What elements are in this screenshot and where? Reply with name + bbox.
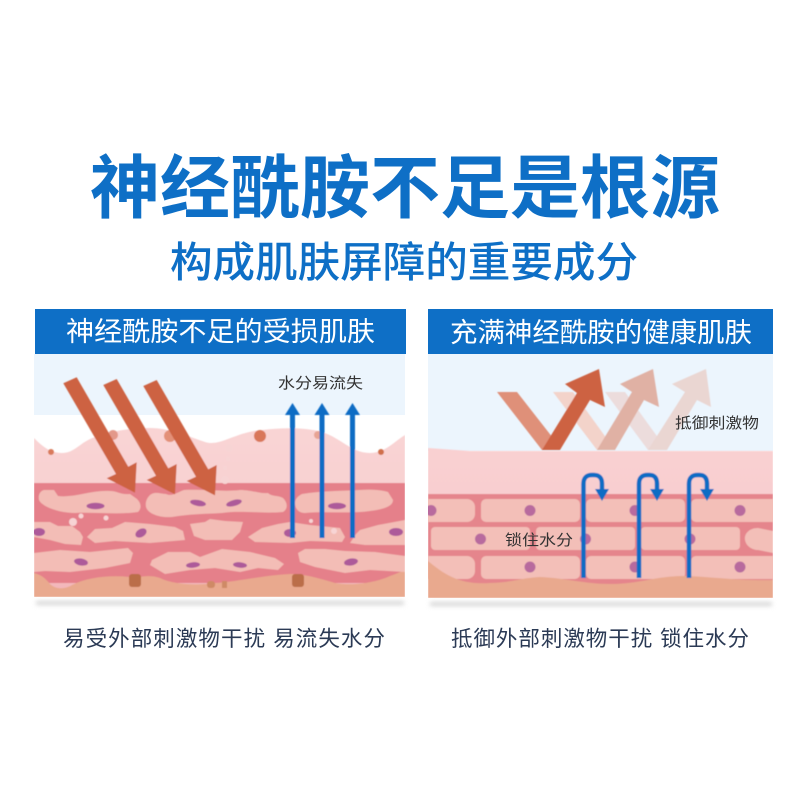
label: lock water: 锁住水分 xyxy=(505,532,573,549)
panel: damaged skin xyxy=(33,309,406,651)
subtitle: 构成肌肤屏障的重要成分 xyxy=(170,239,638,286)
cell nuclei xyxy=(426,505,746,572)
title: 神经酰胺不足是根源 xyxy=(90,150,720,227)
caption: 抵御外部刺激物干扰 锁住水分 xyxy=(451,627,749,651)
panel shadow xyxy=(430,602,772,606)
cell nuclei xyxy=(33,498,403,568)
skin cells xyxy=(410,499,786,579)
header text: 充满神经酰胺的健康肌肤 xyxy=(450,318,752,348)
icon: three orange arrows pointing down into skin xyxy=(63,377,217,495)
skin layers xyxy=(428,448,773,598)
bubbles xyxy=(68,482,338,534)
bottom skin layer xyxy=(428,561,773,598)
skin illustration xyxy=(410,369,786,598)
skin illustration xyxy=(33,377,405,597)
icon: three reflected orange arrows xyxy=(497,369,711,450)
header bar xyxy=(35,309,406,354)
icon: three blue hook arrows xyxy=(584,475,714,578)
skin layers xyxy=(34,428,405,597)
header bar xyxy=(428,309,773,354)
header text: 神经酰胺不足的受损肌肤 xyxy=(66,317,375,347)
caption: 易受外部刺激物干扰 易流失水分 xyxy=(63,627,385,651)
sky background xyxy=(428,354,773,451)
panel: healthy skin xyxy=(410,309,786,651)
panel shadow xyxy=(36,601,404,605)
sky background xyxy=(34,354,405,415)
label: water loss: 水分易流失 xyxy=(278,375,363,392)
skin cells xyxy=(34,490,405,574)
icon: three blue arrows pointing up xyxy=(285,403,360,538)
label: resist irritants: 抵御刺激物 xyxy=(675,415,759,432)
